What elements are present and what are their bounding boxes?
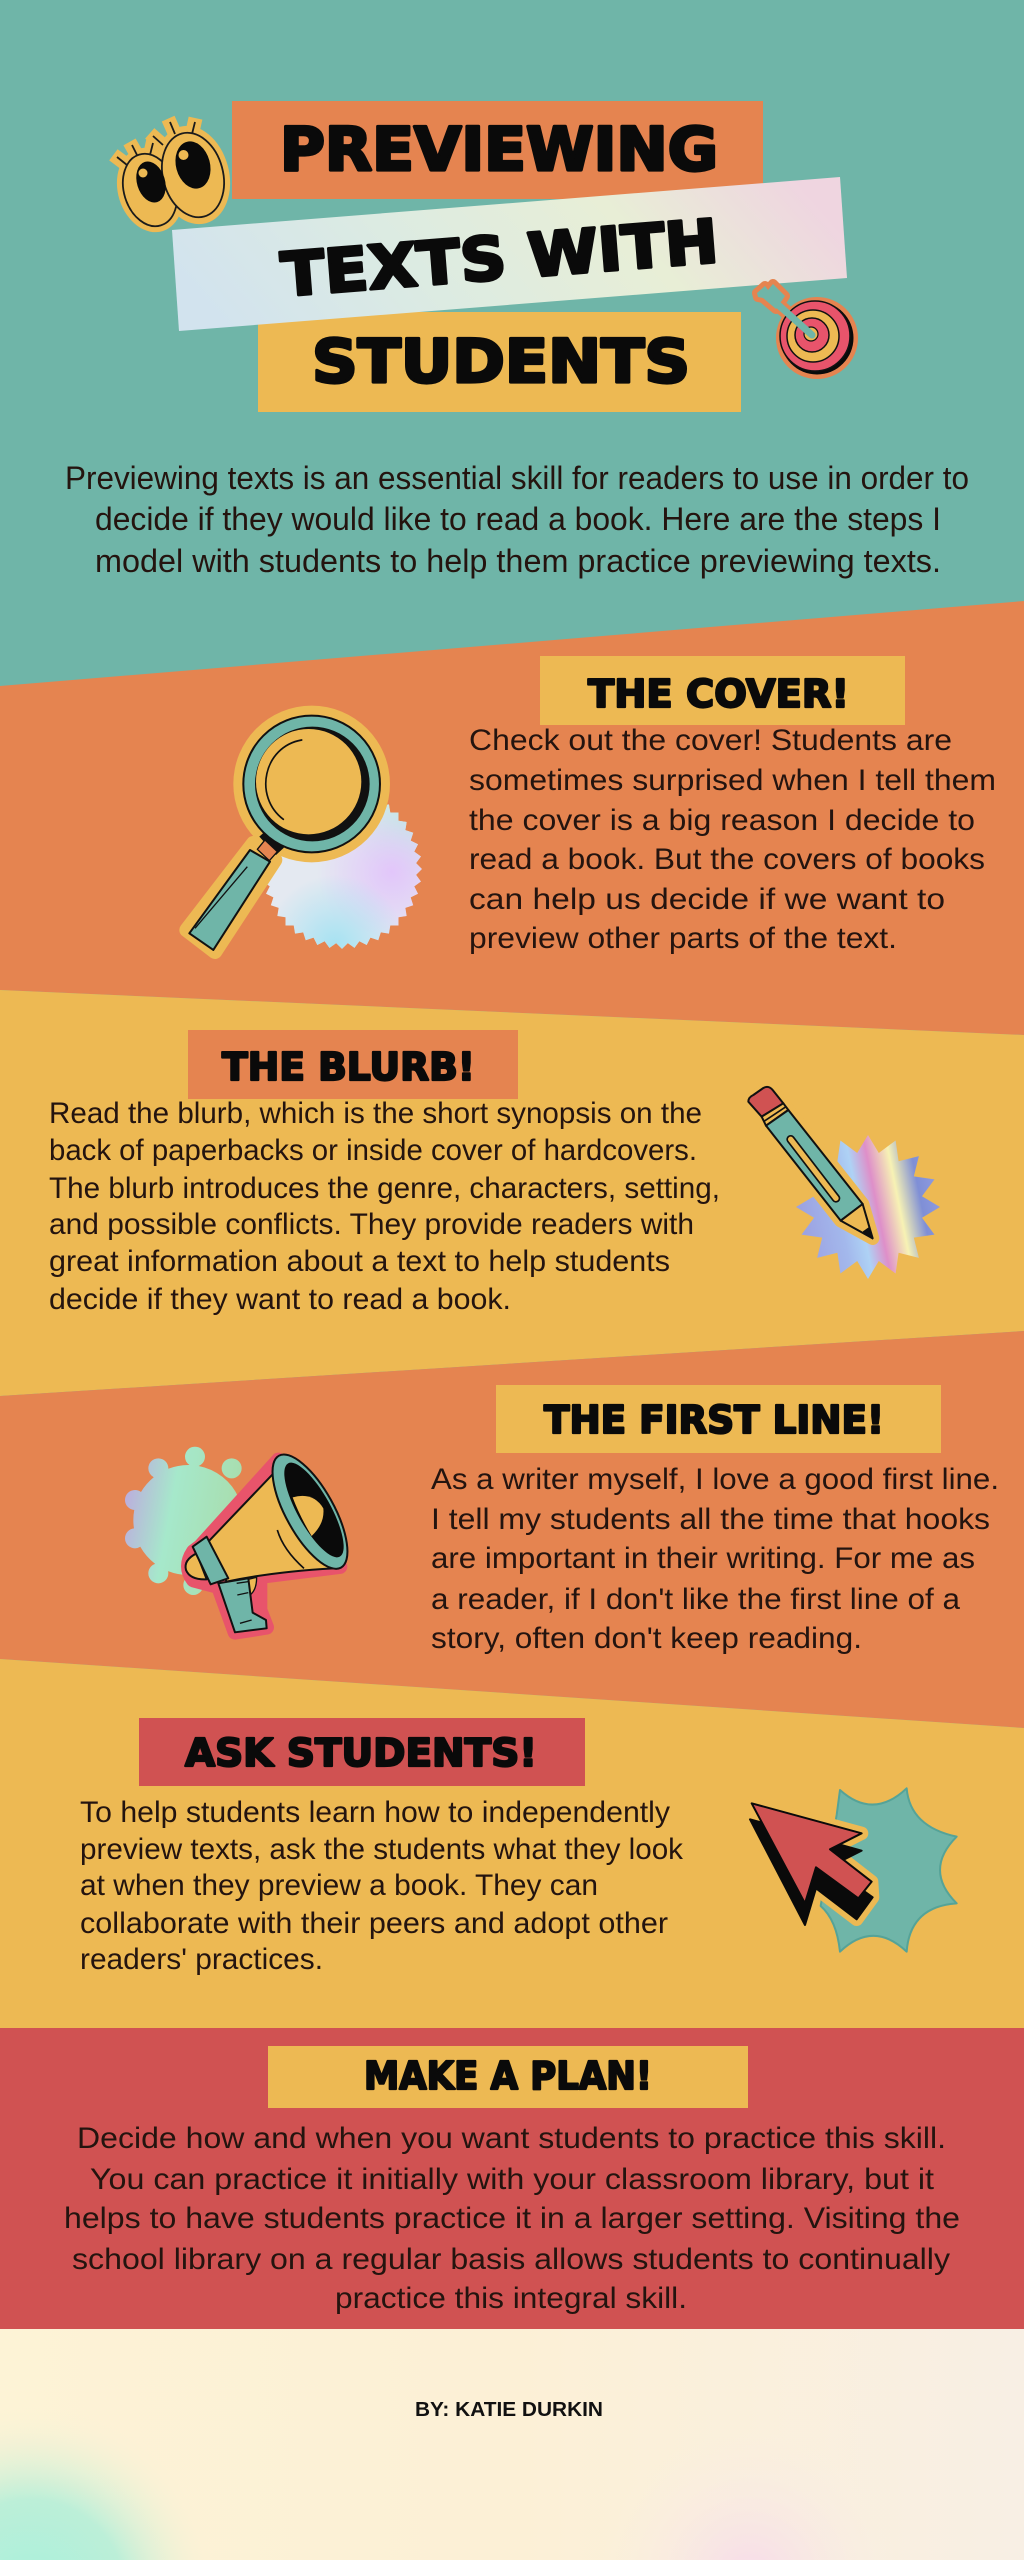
intro text [65, 460, 969, 579]
intro text: Previewing texts is an essential skill for readers to use in order to [65, 460, 969, 496]
text: ask students [80, 1796, 684, 1976]
text: the blurb: decide if they want to read a book. [49, 1283, 511, 1316]
panel: make a plan [64, 2046, 960, 2315]
text: ask students: collaborate with their peers and adopt other [80, 1907, 668, 1940]
text: ask students: at when they preview a book. They can [80, 1869, 598, 1902]
text: the cover: the cover is a big reason I decide to [469, 804, 975, 837]
band: footer [0, 2329, 1024, 2560]
text: the cover: Check out the cover! Students are [469, 724, 952, 757]
text: the cover: read a book. But the covers of books [469, 843, 985, 876]
band: ask students [0, 1659, 1024, 2030]
title: TEXTS WITH [279, 207, 721, 311]
band: cover [0, 601, 1024, 1035]
text: the cover: preview other parts of the text. [469, 922, 897, 955]
heading: ask students [139, 1718, 585, 1786]
title [172, 101, 847, 412]
text: the first line: are important in their writing. For me as [431, 1542, 975, 1575]
icon: googly eyes [107, 117, 241, 240]
text: the first line: As a writer myself, I love a good first line. [431, 1463, 999, 1496]
icon: pencil [748, 1087, 940, 1279]
text: the blurb: back of paperbacks or inside cover of hardcovers. [49, 1134, 697, 1167]
text: the cover: sometimes surprised when I tell them [469, 764, 996, 797]
icon: megaphone [117, 1440, 362, 1632]
heading: the blurb [188, 1030, 518, 1099]
intro text: decide if they would like to read a book. Here are the steps I [95, 501, 941, 537]
heading: the first line [496, 1385, 941, 1453]
text: the first line: a reader, if I don't like the first line of a [431, 1583, 960, 1616]
title: STUDENTS [312, 327, 690, 397]
heading: the first line: THE FIRST LINE! [544, 1398, 884, 1442]
panel: the cover [187, 656, 996, 960]
panel: the first line [117, 1385, 999, 1655]
text: the blurb: Read the blurb, which is the short synopsis on the [49, 1097, 702, 1130]
heading: make a plan: MAKE A PLAN! [364, 2054, 652, 2098]
title: PREVIEWING [280, 115, 718, 185]
heading: ask students: ASK STUDENTS! [185, 1731, 537, 1775]
icon: cursor arrow [750, 1788, 957, 1952]
footer byline: BY: KATIE DURKIN [415, 2399, 603, 2421]
text: make a plan: school library on a regular basis allows students to continually [72, 2243, 950, 2276]
text: the blurb: The blurb introduces the genre, characters, setting, [49, 1172, 720, 1205]
text: make a plan: You can practice it initially with your classroom library, but it [90, 2163, 935, 2196]
text: ask students: preview texts, ask the students what they look [80, 1833, 684, 1866]
text: the cover: can help us decide if we want to [469, 883, 945, 916]
text: ask students: To help students learn how to independently [80, 1796, 670, 1829]
panel: the blurb [49, 1030, 940, 1316]
text: the first line [431, 1463, 999, 1655]
text: make a plan: helps to have students practice it in a larger setting. Visiting the [64, 2202, 960, 2235]
text: make a plan: Decide how and when you want students to practice this skill. [77, 2122, 946, 2155]
heading: the cover: THE COVER! [588, 672, 849, 716]
text: make a plan [64, 2122, 960, 2315]
panel: ask students [80, 1718, 957, 1976]
text: the cover [469, 724, 996, 955]
band: blurb [0, 990, 1024, 1396]
band: first line [0, 1331, 1024, 1728]
heading: make a plan [268, 2046, 748, 2108]
icon: magnifying glass [187, 706, 440, 960]
text: make a plan: practice this integral skill. [335, 2282, 687, 2315]
text: ask students: readers' practices. [80, 1943, 323, 1976]
text: the blurb: and possible conflicts. They provide readers with [49, 1208, 694, 1241]
text: the blurb: great information about a text to help students [49, 1245, 670, 1278]
band: make a plan [0, 2028, 1024, 2329]
heading: the blurb: THE BLURB! [222, 1045, 475, 1089]
intro text: model with students to help them practice previewing texts. [95, 543, 941, 579]
text: the first line: story, often don't keep reading. [431, 1622, 862, 1655]
icon: dart target [757, 284, 858, 379]
text: the blurb [49, 1097, 720, 1316]
heading: the cover [540, 656, 905, 725]
text: the first line: I tell my students all the time that hooks [431, 1503, 990, 1536]
